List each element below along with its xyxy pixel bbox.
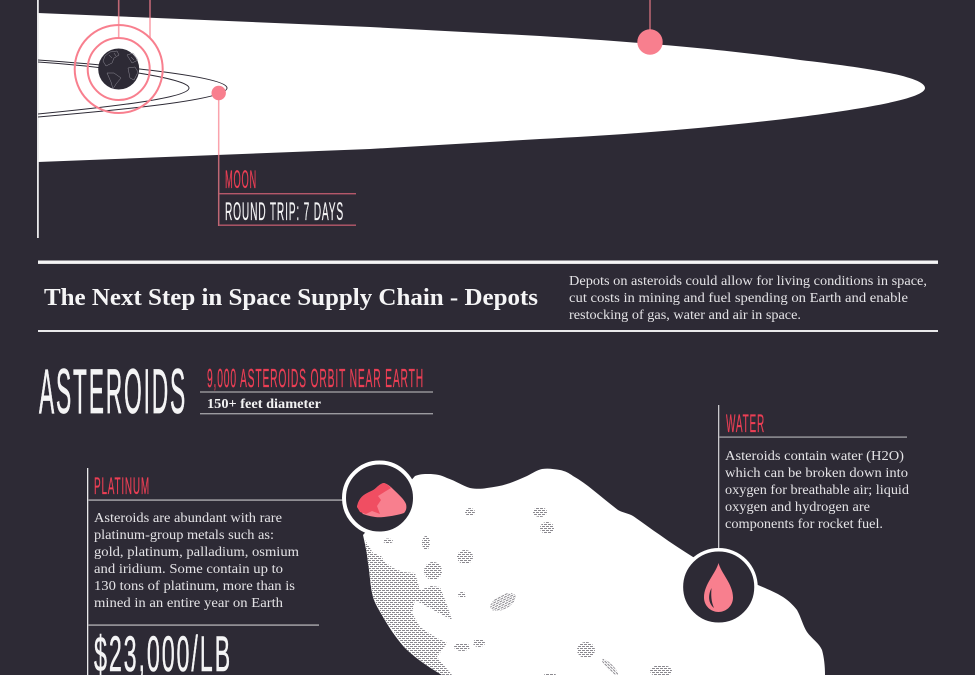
panel: platinum: PLATINUM: [94, 473, 150, 500]
left axis line: [37, 0, 39, 238]
asteroids header: ASTEROIDS: [39, 357, 187, 427]
banner heading: The Next Step in Space Supply Chain - Depots: [44, 284, 538, 311]
water description: which can be broken down into: [725, 466, 908, 481]
water description: oxygen and hydrogen are: [725, 500, 870, 515]
water description: components for rocket fuel.: [725, 517, 883, 532]
water description: Asteroids contain water (H2O): [725, 449, 904, 464]
platinum description: mined in an entire year on Earth: [94, 596, 283, 611]
moon label: MOON: [225, 166, 257, 194]
banner description: [569, 274, 927, 323]
panel: water: [718, 405, 909, 550]
platinum description: and iridium. Some contain up to: [94, 562, 283, 577]
water description: [725, 449, 909, 532]
asteroid illustration: [363, 469, 825, 675]
banner description: restocking of gas, water and air in space.: [569, 308, 801, 323]
platinum description: platinum-group metals such as:: [94, 528, 274, 543]
diagram: distance from Earth: [37, 0, 925, 238]
icon: platinum ore: [344, 462, 415, 534]
panel: water: WATER: [726, 410, 765, 438]
moon marker: [212, 86, 226, 226]
banner description: Depots on asteroids could allow for living conditions in space,: [569, 274, 927, 289]
banner description: cut costs in mining and fuel spending on Earth and enable: [569, 291, 908, 306]
moon label: [219, 166, 356, 226]
crater texture: [365, 507, 672, 675]
white space trajectory shape: [38, 13, 925, 162]
asteroid body: [363, 469, 825, 675]
diameter note: 150+ feet diameter: [207, 397, 321, 412]
icon: water drop: [681, 550, 756, 624]
platinum description: 130 tons of platinum, more than is: [94, 579, 295, 594]
platinum description: gold, platinum, palladium, osmium: [94, 545, 299, 560]
infographic canvas: 9,000 ASTEROIDS ORBIT NEAR EARTH: [207, 363, 424, 393]
water description: oxygen for breathable air; liquid: [725, 483, 909, 498]
Earth with rings: [75, 0, 163, 113]
depots banner: [38, 260, 938, 332]
platinum description: [94, 511, 299, 611]
diagram: distance from Earth: ROUND TRIP: 7 DAYS: [225, 198, 344, 226]
platinum description: Asteroids are abundant with rare: [94, 511, 282, 526]
orbit paths: [38, 60, 227, 117]
panel: platinum: [87, 468, 344, 675]
far destination marker: [637, 0, 663, 55]
